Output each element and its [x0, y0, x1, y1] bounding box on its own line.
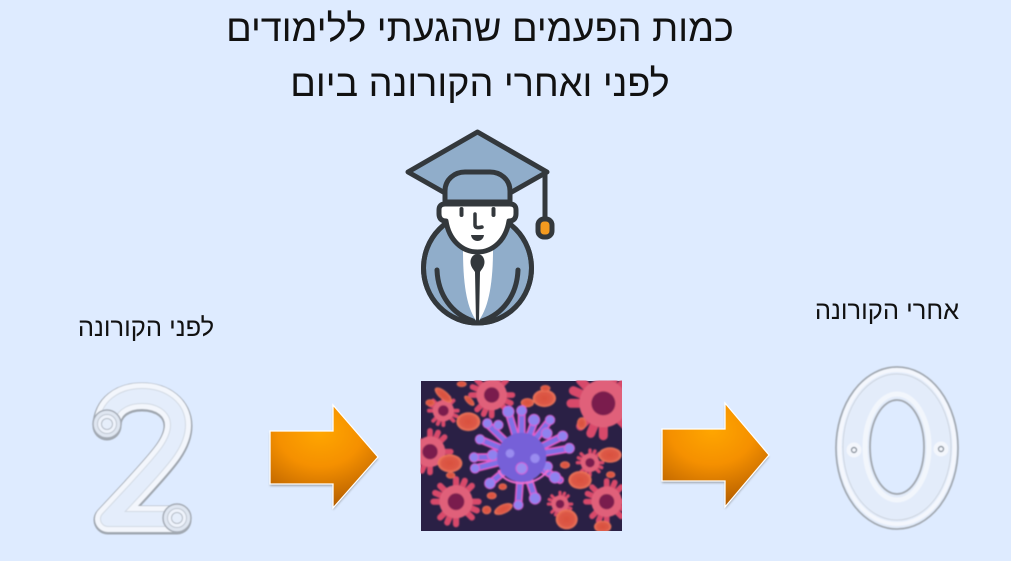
label: after corona: אחרי הקורונה: [815, 297, 959, 325]
screw left: [846, 442, 862, 458]
arrow one: [270, 405, 378, 510]
red viruses: [471, 374, 512, 416]
screw bottom: [163, 504, 191, 532]
eyes: [462, 209, 494, 215]
screw right: [934, 442, 948, 456]
icon: graduate: [408, 132, 552, 323]
tassel cord: [542, 173, 548, 218]
arrow two: [662, 403, 769, 509]
digit two: [93, 396, 191, 532]
purple virus: [469, 406, 574, 510]
nose: [475, 214, 482, 228]
tassel: [538, 219, 552, 237]
screw top: [93, 410, 121, 438]
arm lines: [437, 270, 518, 321]
title: [226, 8, 734, 105]
mortarboard: [408, 132, 547, 193]
shirt: [463, 250, 493, 322]
head with ears: [439, 204, 516, 252]
tie: [470, 254, 484, 322]
body: [424, 213, 532, 323]
mouth: [471, 235, 484, 241]
label: before corona: לפני הקורונה: [78, 314, 214, 342]
red blood cells: [425, 381, 622, 533]
digit zero: [836, 367, 958, 529]
cap band: [445, 172, 510, 202]
title: לפני ואחרי הקורונה ביום: [290, 63, 670, 105]
virus image: [420, 380, 622, 531]
title: כמות הפעמים שהגעתי ללימודים: [226, 8, 734, 50]
